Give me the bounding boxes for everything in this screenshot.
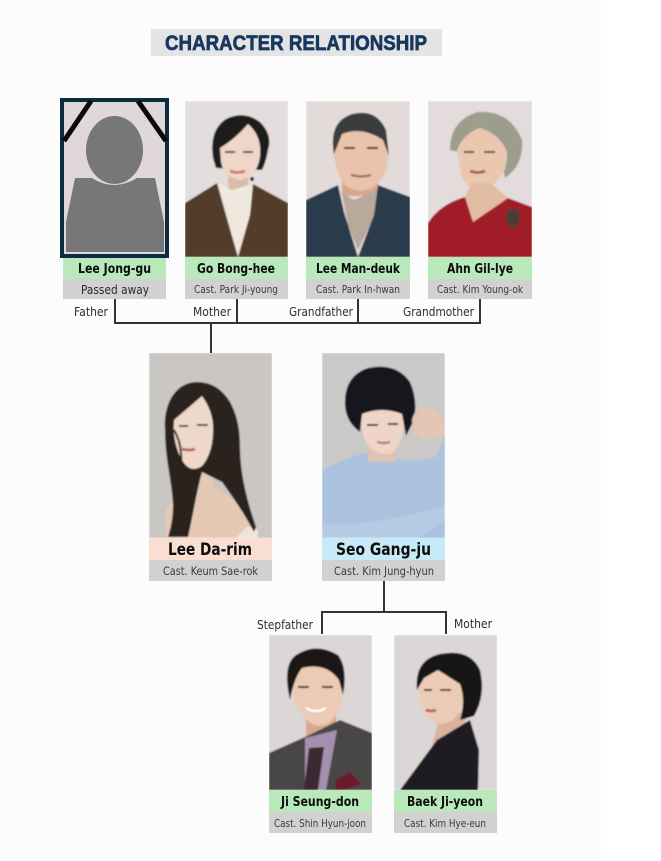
card: Lee Da-rim: Lee Da-rim: [168, 540, 252, 560]
card: Lee Da-rim: Cast. Keum Sae-rok: [163, 564, 258, 578]
card: Go Bong-hee: Go Bong-hee: [197, 261, 275, 277]
card: Go Bong-hee: Cast. Park Ji-young: [194, 284, 278, 296]
label: Father: Father: [74, 304, 109, 319]
portrait placeholder with mourning frame: [62, 100, 167, 256]
card: Lee Man-deuk: [306, 101, 410, 299]
card: Lee Man-deuk: Cast. Park In-hwan: [316, 284, 400, 296]
card: Ji Seung-don: Ji Seung-don: [280, 794, 359, 810]
card: Baek Ji-yeon: Cast. Kim Hye-eun: [404, 818, 486, 830]
label: Mother (Seo Gang-ju): Mother: [454, 616, 493, 631]
portrait: Go Bong-hee: [185, 101, 288, 257]
card: Baek Ji-yeon: [394, 635, 497, 833]
card: Ahn Gil-lye: Ahn Gil-lye: [447, 261, 513, 277]
connector: Seo Gang-ju to parents: [322, 581, 446, 634]
card: Lee Da-rim: [149, 353, 272, 581]
portrait: Seo Gang-ju: [322, 353, 445, 538]
card: Seo Gang-ju: Seo Gang-ju: [336, 540, 431, 560]
label: Stepfather: Stepfather: [257, 617, 314, 632]
label: Grandfather: Grandfather: [289, 304, 354, 319]
portrait: Ji Seung-don: [269, 635, 372, 790]
card: Lee Jong-gu: Passed away: [81, 282, 150, 297]
card: Go Bong-hee: [185, 101, 288, 299]
card: Baek Ji-yeon: Baek Ji-yeon: [407, 794, 483, 810]
card: Ahn Gil-lye: Cast. Kim Young-ok: [437, 284, 524, 296]
portrait: Lee Da-rim: [149, 353, 272, 538]
card: Lee Man-deuk: Lee Man-deuk: [316, 261, 401, 277]
card: Seo Gang-ju: Cast. Kim Jung-hyun: [334, 564, 434, 578]
card: Ji Seung-don: [269, 635, 372, 833]
label: Mother: Mother: [193, 304, 232, 319]
portrait: Ahn Gil-lye: [428, 101, 532, 257]
portrait: Lee Man-deuk: [306, 101, 410, 257]
title: CHARACTER RELATIONSHIP: [165, 32, 427, 55]
card: Ahn Gil-lye: [428, 101, 532, 299]
card: Ji Seung-don: Cast. Shin Hyun-joon: [274, 818, 366, 830]
card: Lee Jong-gu: [62, 100, 167, 299]
connector: parents to Lee Da-rim: [115, 299, 480, 353]
portrait: Baek Ji-yeon: [394, 635, 497, 790]
label: Grandmother: Grandmother: [403, 304, 475, 319]
card: Seo Gang-ju: [322, 353, 445, 581]
card: Lee Jong-gu: Lee Jong-gu: [78, 261, 151, 277]
